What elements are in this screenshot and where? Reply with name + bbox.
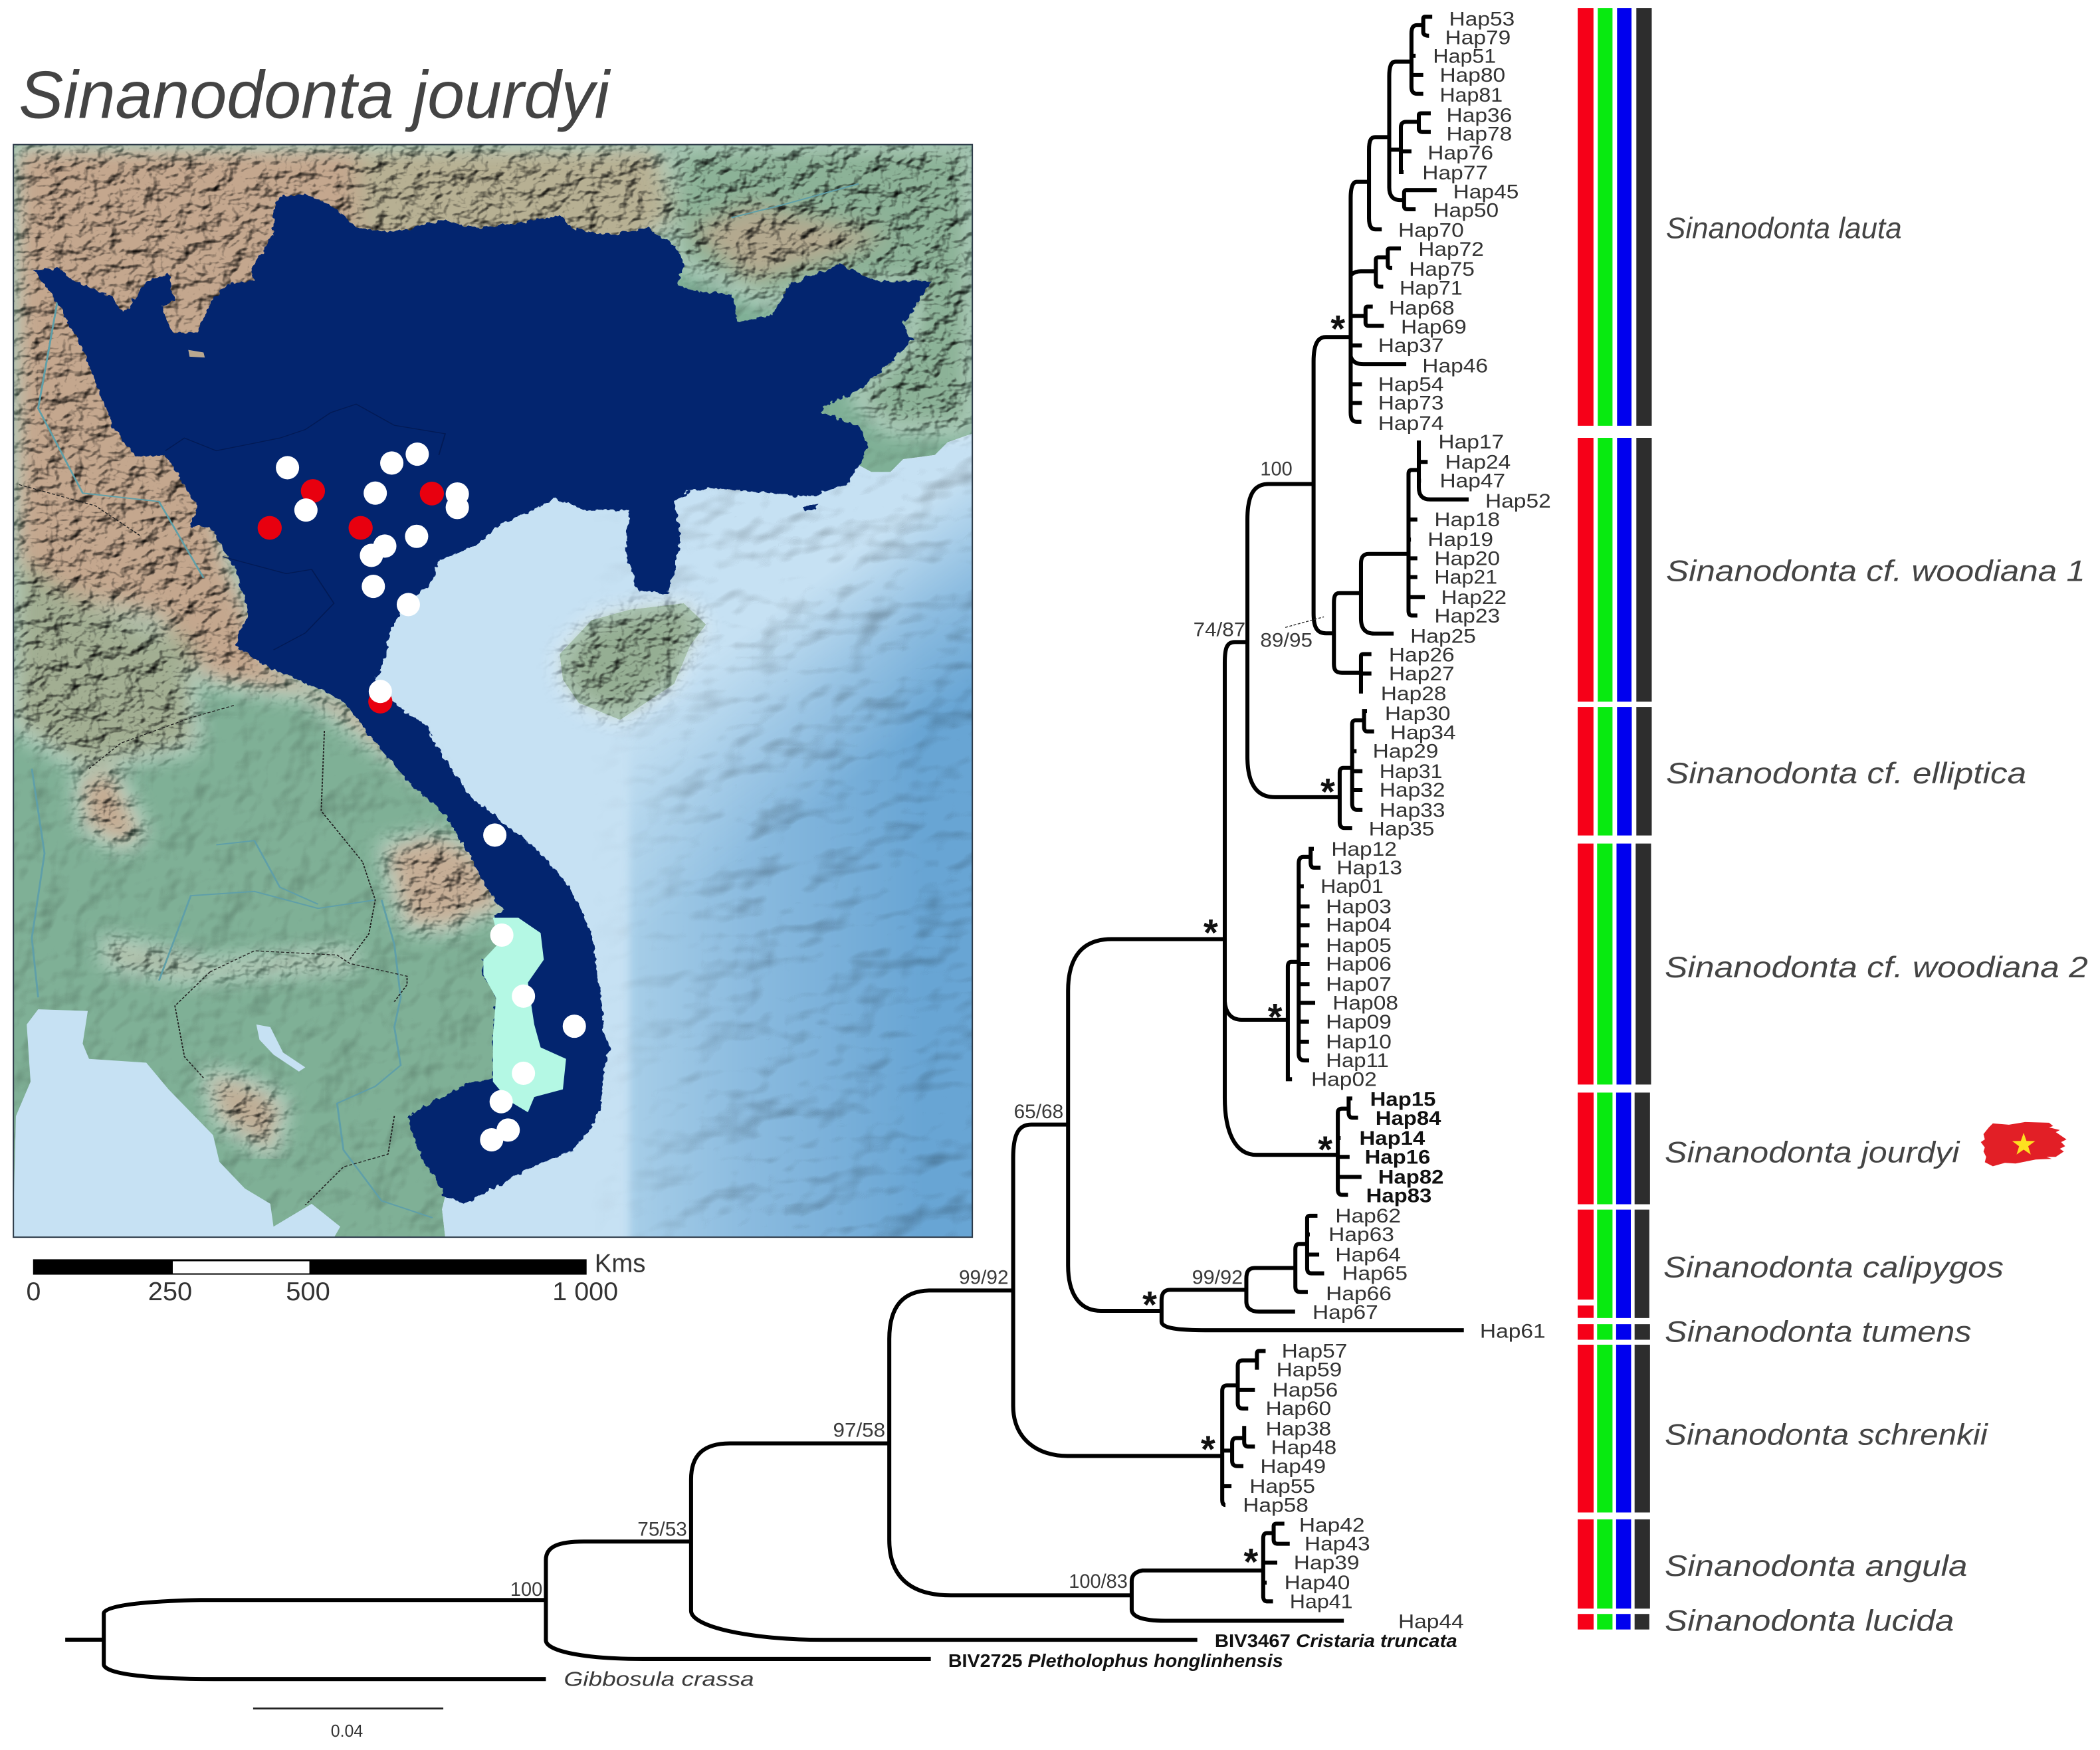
haplotype labels: Sinanodonta lauta: Hap45 xyxy=(1453,181,1519,203)
haplotype labels: Sinanodonta schrenkii: Hap59 xyxy=(1277,1360,1342,1381)
haplotype labels: Sinanodonta schrenkii: Hap49 xyxy=(1260,1456,1326,1478)
haplotype labels: Sinanodonta cf. woodiana 2: Hap06 xyxy=(1326,954,1392,975)
species labels: Sinanodonta lauta xyxy=(1666,213,1902,245)
haplotype labels: Sinanodonta cf. woodiana 1: Hap19 xyxy=(1427,530,1493,551)
haplotype labels: Sinanodonta cf. woodiana 2: Hap12 xyxy=(1331,839,1397,860)
haplotype labels: Sinanodonta jourdyi (bold): Hap14 xyxy=(1360,1128,1425,1149)
map scale bar: 0 xyxy=(26,1277,41,1306)
map scale bar: Kms xyxy=(595,1249,645,1278)
haplotype labels: Sinanodonta jourdyi (bold): Hap15 xyxy=(1370,1090,1435,1111)
haplotype labels: Sinanodonta cf. woodiana 1: Hap20 xyxy=(1434,548,1500,569)
icon: Vietnam flag xyxy=(1981,1122,2067,1166)
marker bars: Sinanodonta cf. woodiana 1 xyxy=(1578,438,1651,702)
marker bars: Sinanodonta lucida xyxy=(1578,1614,1649,1630)
haplotype labels: Sinanodonta lauta: Hap70 xyxy=(1398,221,1464,242)
haplotype labels: Sinanodonta jourdyi (bold): Hap84 xyxy=(1376,1108,1441,1129)
haplotype labels: Sinanodonta cf. woodiana 1: Hap27 xyxy=(1389,664,1455,685)
species labels: Sinanodonta schrenkii xyxy=(1665,1419,1988,1452)
map scale bar: 250 xyxy=(148,1277,192,1306)
haplotype labels: Sinanodonta cf. woodiana 1: Hap24 xyxy=(1445,452,1511,473)
panel: distribution map xyxy=(13,144,991,1256)
marker bars: Sinanodonta lauta xyxy=(1578,8,1651,426)
clade: Sinanodonta lauta branches xyxy=(1350,17,1437,422)
tree scale bar: 0.04 xyxy=(331,1721,363,1741)
haplotype labels: Sinanodonta cf. woodiana 1: Hap25 xyxy=(1410,626,1476,647)
haplotype labels: Sinanodonta lauta: Hap46 xyxy=(1422,355,1488,377)
haplotype labels: Sinanodonta lauta: Hap76 xyxy=(1427,143,1493,164)
haplotype labels: Sinanodonta lauta: Hap77 xyxy=(1422,163,1488,184)
posterior support asterisks: * xyxy=(1268,996,1283,1038)
haplotype labels: Sinanodonta cf. woodiana 1: Hap47 xyxy=(1439,471,1505,492)
outgroup labels xyxy=(564,1630,1457,1690)
haplotype labels: Sinanodonta calipygos and tumens: Hap66 xyxy=(1326,1284,1392,1305)
haplotype labels: Sinanodonta calipygos and tumens: Hap64 xyxy=(1335,1244,1401,1266)
map scale bar: 500 xyxy=(286,1277,330,1306)
posterior support asterisks: * xyxy=(1318,1128,1332,1170)
species labels: Sinanodonta cf. elliptica xyxy=(1666,757,2026,790)
haplotype labels: Sinanodonta cf. woodiana 1: Hap23 xyxy=(1434,606,1500,627)
haplotype labels: Sinanodonta cf. woodiana 1: Hap22 xyxy=(1441,587,1507,609)
species labels: Sinanodonta lucida xyxy=(1665,1605,1954,1638)
species labels: Sinanodonta tumens xyxy=(1665,1315,1972,1348)
haplotype labels: Sinanodonta lauta: Hap71 xyxy=(1400,278,1463,299)
haplotype labels: Sinanodonta lauta: Hap75 xyxy=(1409,259,1475,280)
haplotype labels: Sinanodonta lauta: Hap72 xyxy=(1418,239,1484,260)
marker bars: Sinanodonta angula xyxy=(1578,1519,1650,1608)
marker bars: Sinanodonta calipygos xyxy=(1578,1210,1649,1318)
species labels: Sinanodonta angula xyxy=(1665,1550,1967,1583)
phylogenetic tree: backbone xyxy=(65,337,1350,1679)
haplotype labels: Sinanodonta lauta: Hap54 xyxy=(1378,374,1443,395)
haplotype labels: Sinanodonta calipygos and tumens xyxy=(1312,1206,1546,1342)
haplotype labels: Sinanodonta cf. elliptica: Hap33 xyxy=(1380,800,1445,821)
haplotype labels: Sinanodonta cf. woodiana 2: Hap11 xyxy=(1326,1050,1389,1072)
haplotype labels: Sinanodonta cf. woodiana 1: Hap26 xyxy=(1389,645,1455,666)
posterior support asterisks xyxy=(1142,308,1345,1583)
haplotype labels: Sinanodonta schrenkii: Hap38 xyxy=(1265,1418,1331,1440)
land lowlands xyxy=(13,144,972,1237)
haplotype labels: Sinanodonta cf. woodiana 2: Hap09 xyxy=(1326,1012,1392,1033)
support values: 100/83 xyxy=(1069,1571,1128,1593)
haplotype labels: Sinanodonta calipygos and tumens: Hap65 xyxy=(1342,1264,1408,1285)
posterior support asterisks: * xyxy=(1243,1541,1258,1583)
support values xyxy=(510,458,1312,1601)
support values: 75/53 xyxy=(637,1519,687,1541)
haplotype labels: Sinanodonta lauta: Hap73 xyxy=(1378,393,1443,415)
haplotype labels: Sinanodonta cf. elliptica: Hap31 xyxy=(1380,761,1442,783)
haplotype labels: Sinanodonta cf. woodiana 1 xyxy=(1381,432,1551,705)
haplotype labels: Sinanodonta jourdyi (bold): Hap16 xyxy=(1365,1147,1430,1168)
haplotype labels: Sinanodonta cf. woodiana 2: Hap10 xyxy=(1326,1032,1392,1053)
haplotype labels: Sinanodonta cf. elliptica: Hap30 xyxy=(1385,704,1451,725)
posterior support asterisks: * xyxy=(1201,1428,1215,1470)
outgroup labels: BIV3467 Cristaria truncata xyxy=(1215,1630,1457,1651)
species labels: Sinanodonta jourdyi xyxy=(1665,1136,1960,1169)
species labels xyxy=(1663,213,2088,1638)
outgroup labels: BIV2725 Pletholophus honglinhensis xyxy=(948,1650,1283,1671)
posterior support asterisks: * xyxy=(1204,912,1218,953)
haplotype labels: Sinanodonta jourdyi (bold) xyxy=(1360,1090,1443,1207)
haplotype labels: Sinanodonta angula and lucida: Hap43 xyxy=(1305,1534,1370,1555)
haplotype labels: Sinanodonta lauta: Hap74 xyxy=(1378,413,1443,435)
outgroup labels: Gibbosula crassa xyxy=(564,1668,754,1690)
clade: Sinanodonta cf. woodiana 2 branches xyxy=(1288,849,1320,1079)
clade: Sinanodonta cf. woodiana 1 branches xyxy=(1334,440,1469,694)
haplotype labels: Sinanodonta cf. woodiana 2: Hap02 xyxy=(1311,1069,1377,1090)
species range: navy area xyxy=(35,195,932,1204)
mountains relief xyxy=(13,144,972,1159)
haplotype labels: Sinanodonta cf. woodiana 1: Hap17 xyxy=(1438,432,1504,453)
haplotype labels: Sinanodonta lauta: Hap36 xyxy=(1447,105,1512,126)
haplotype labels: Sinanodonta calipygos and tumens: Hap62 xyxy=(1335,1206,1401,1227)
map scale bar: 1 000 xyxy=(552,1277,618,1306)
haplotype labels: Sinanodonta cf. woodiana 1: Hap21 xyxy=(1434,567,1497,589)
clade: Sinanodonta cf. elliptica branches xyxy=(1340,711,1374,828)
haplotype labels: Sinanodonta calipygos and tumens: Hap67 xyxy=(1312,1302,1378,1323)
marker bars: Sinanodonta schrenkii xyxy=(1578,1345,1650,1512)
haplotype labels: Sinanodonta jourdyi (bold): Hap82 xyxy=(1378,1167,1443,1189)
support values: 65/68 xyxy=(1014,1102,1063,1123)
haplotype labels: Sinanodonta cf. woodiana 2: Hap03 xyxy=(1326,896,1392,918)
support values: 99/92 xyxy=(1192,1268,1243,1289)
marker bars: Sinanodonta tumens xyxy=(1578,1324,1650,1340)
haplotype labels: Sinanodonta schrenkii: Hap56 xyxy=(1273,1380,1338,1401)
haplotype labels: Sinanodonta cf. elliptica xyxy=(1369,704,1456,840)
haplotype labels: Sinanodonta cf. elliptica: Hap35 xyxy=(1369,819,1434,840)
haplotype labels: Sinanodonta cf. woodiana 2 xyxy=(1311,839,1402,1090)
haplotype labels: Sinanodonta schrenkii: Hap48 xyxy=(1271,1438,1336,1459)
posterior support asterisks: * xyxy=(1142,1284,1157,1325)
haplotype labels: Sinanodonta angula and lucida: Hap39 xyxy=(1294,1553,1360,1574)
haplotype labels: Sinanodonta angula and lucida: Hap44 xyxy=(1398,1612,1464,1633)
haplotype labels: Sinanodonta cf. woodiana 2: Hap01 xyxy=(1320,876,1384,898)
haplotype labels: Sinanodonta lauta: Hap78 xyxy=(1447,124,1512,146)
haplotype labels: Sinanodonta cf. woodiana 1: Hap52 xyxy=(1485,491,1551,512)
support values: 99/92 xyxy=(959,1268,1009,1289)
haplotype labels: Sinanodonta schrenkii: Hap60 xyxy=(1265,1399,1331,1420)
haplotype labels: Sinanodonta cf. elliptica: Hap32 xyxy=(1380,780,1445,801)
support values: 89/95 xyxy=(1260,630,1312,651)
haplotype labels: Sinanodonta lauta xyxy=(1378,9,1519,435)
haplotype labels: Sinanodonta schrenkii: Hap55 xyxy=(1249,1476,1315,1498)
haplotype labels: Sinanodonta cf. woodiana 1: Hap28 xyxy=(1381,684,1447,705)
marker bars: Sinanodonta cf. woodiana 2 xyxy=(1578,844,1651,1084)
haplotype labels: Sinanodonta calipygos and tumens: Hap63 xyxy=(1328,1224,1394,1246)
haplotype labels: Sinanodonta cf. elliptica: Hap34 xyxy=(1390,722,1456,743)
marker bars: Sinanodonta cf. elliptica xyxy=(1578,707,1651,836)
haplotype labels: Sinanodonta schrenkii: Hap58 xyxy=(1243,1495,1309,1516)
support values: 74/87 xyxy=(1194,619,1245,640)
haplotype labels: Sinanodonta lauta: Hap81 xyxy=(1439,85,1503,106)
haplotype labels: Sinanodonta angula and lucida: Hap42 xyxy=(1299,1515,1365,1537)
haplotype labels: Sinanodonta cf. woodiana 2: Hap13 xyxy=(1336,858,1402,879)
clade: Sinanodonta angula and lucida branches xyxy=(1132,1523,1344,1621)
clade: Sinanodonta calipygos and tumens branches xyxy=(1162,1216,1464,1330)
marker bars: Sinanodonta jourdyi xyxy=(1578,1092,1650,1205)
haplotype labels: Sinanodonta angula and lucida: Hap40 xyxy=(1285,1573,1350,1594)
support values: 97/58 xyxy=(833,1420,885,1441)
title: Sinanodonta jourdyi xyxy=(19,58,611,132)
support values: 100 xyxy=(1260,458,1293,480)
species labels: Sinanodonta calipygos xyxy=(1663,1252,2004,1284)
posterior support asterisks: * xyxy=(1330,308,1345,349)
posterior support asterisks: * xyxy=(1320,771,1335,813)
haplotype labels: Sinanodonta lauta: Hap79 xyxy=(1445,28,1511,49)
haplotype labels: Sinanodonta lauta: Hap69 xyxy=(1401,317,1467,338)
clade: Sinanodonta jourdyi branches xyxy=(1338,1098,1362,1195)
haplotype labels: Sinanodonta angula and lucida xyxy=(1285,1515,1464,1633)
haplotype labels: Sinanodonta lauta: Hap50 xyxy=(1433,200,1499,221)
haplotype labels: Sinanodonta lauta: Hap37 xyxy=(1378,336,1443,357)
haplotype labels: Sinanodonta cf. woodiana 2: Hap07 xyxy=(1326,974,1392,995)
haplotype labels: Sinanodonta cf. woodiana 1: Hap18 xyxy=(1434,510,1500,531)
clade: Sinanodonta schrenkii branches xyxy=(1222,1351,1265,1505)
haplotype labels: Sinanodonta cf. elliptica: Hap29 xyxy=(1373,741,1438,763)
haplotype labels: Sinanodonta lauta: Hap80 xyxy=(1439,65,1505,86)
species labels: Sinanodonta cf. woodiana 1 xyxy=(1666,555,2085,588)
support leader: 89/95 xyxy=(1285,617,1324,627)
haplotype labels: Sinanodonta schrenkii: Hap57 xyxy=(1282,1341,1347,1363)
gulf of Thailand xyxy=(13,184,859,1243)
haplotype labels: Sinanodonta lauta: Hap51 xyxy=(1433,47,1496,68)
map scale bar xyxy=(26,1249,645,1306)
haplotype labels: Sinanodonta cf. woodiana 2: Hap04 xyxy=(1326,916,1392,937)
haplotype labels: Sinanodonta angula and lucida: Hap41 xyxy=(1290,1591,1352,1612)
species range: light cyan area xyxy=(483,918,566,1112)
haplotype labels: Sinanodonta lauta: Hap53 xyxy=(1449,9,1515,30)
haplotype labels: Sinanodonta cf. woodiana 2: Hap08 xyxy=(1332,993,1398,1015)
sampling dots xyxy=(258,442,586,1151)
haplotype labels: Sinanodonta lauta: Hap68 xyxy=(1389,298,1455,320)
haplotype labels: Sinanodonta jourdyi (bold): Hap83 xyxy=(1366,1186,1431,1207)
species labels: Sinanodonta cf. woodiana 2 xyxy=(1665,951,2088,984)
haplotype labels: Sinanodonta calipygos and tumens: Hap61 xyxy=(1480,1321,1546,1342)
support values: 100 xyxy=(510,1579,542,1601)
haplotype labels: Sinanodonta cf. woodiana 2: Hap05 xyxy=(1326,935,1392,957)
haplotype labels: Sinanodonta schrenkii xyxy=(1243,1341,1347,1516)
